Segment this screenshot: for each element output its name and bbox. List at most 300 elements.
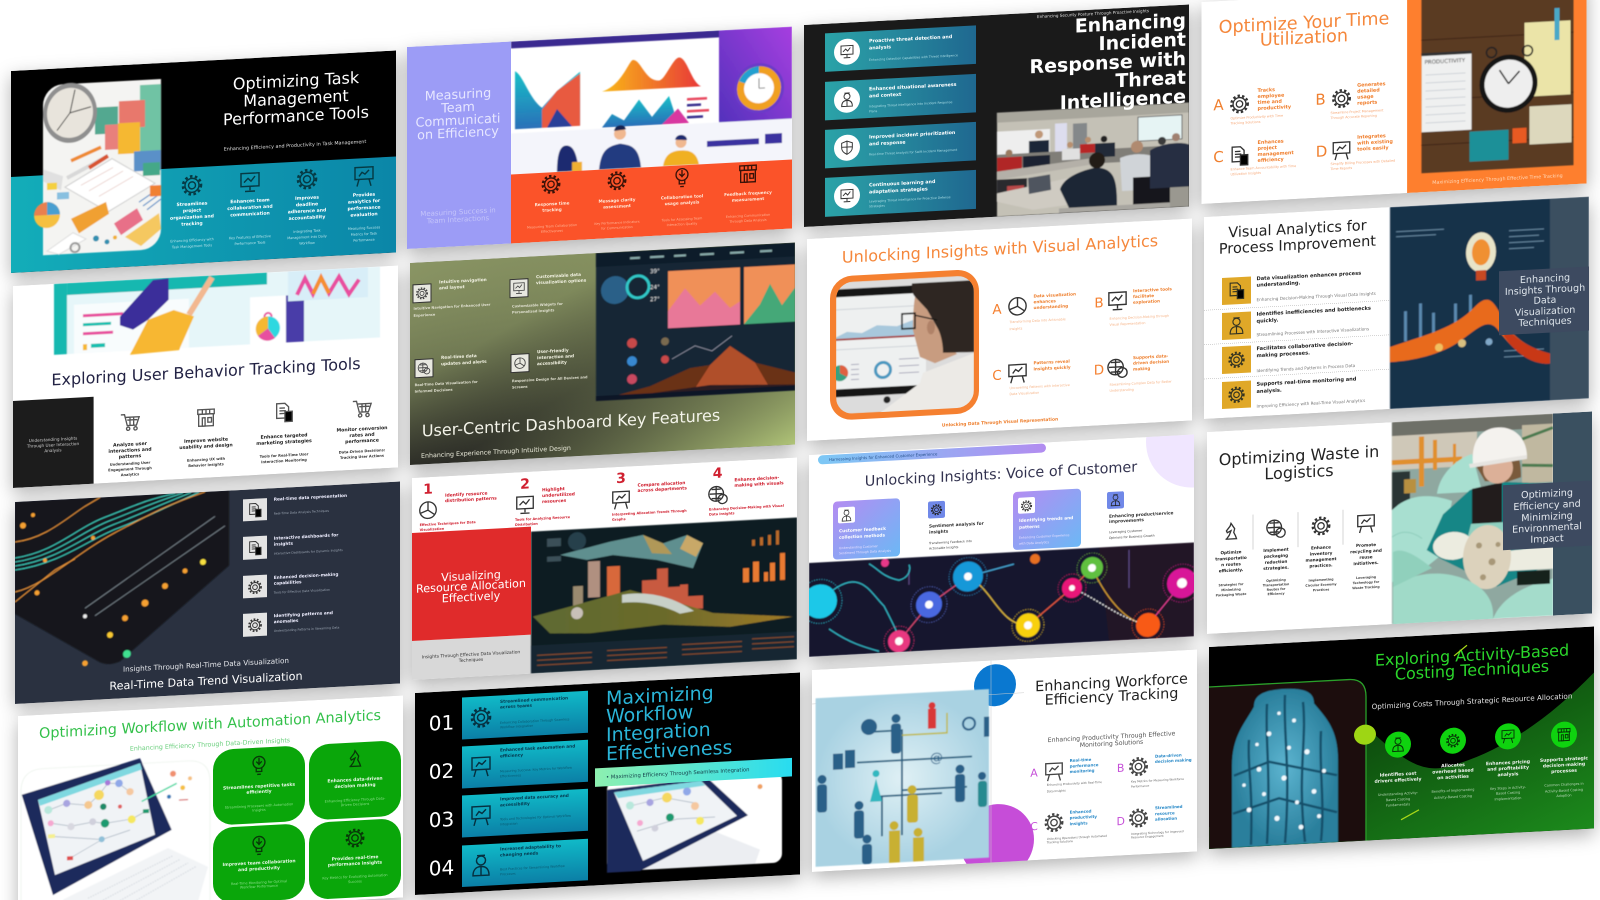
items A B C D: Data Visualization: [1010, 391, 1039, 396]
title: Maximizing: [606, 682, 714, 710]
features: Intuitive navigation: [439, 276, 487, 285]
callout label: Minimizing: [1521, 510, 1573, 524]
picture: glowing bottle jar: [1209, 679, 1366, 849]
step cards: Integration: [500, 822, 518, 826]
panel: Exploring User Behavior Tracking Tools: [13, 265, 398, 488]
step cards: Improved data accuracy and: [500, 792, 569, 802]
items A B C D: Data Insights: [1047, 788, 1066, 793]
items A B C D: Enhancing Productivity with Real-Time: [1047, 780, 1102, 787]
panel: Visualizing Resource Allocation Effectively: [412, 457, 797, 680]
items A B C D: D: [1316, 142, 1327, 161]
list rows: Supports real-time monitoring and: [1256, 376, 1357, 388]
feature cards: [825, 25, 976, 217]
feature columns: measurement: [732, 195, 764, 202]
feature cards: analysis: [869, 44, 891, 51]
highlighted bar: [595, 758, 792, 787]
picture: people network: @: [930, 751, 943, 766]
items A B C D: productivity: [1258, 104, 1292, 112]
feature columns: Management into Daily: [287, 234, 327, 240]
numbered items: Distribution: [515, 522, 538, 527]
panel: Real-Time Data Trend Visualization: [15, 481, 400, 704]
list rows: Facilitates collaborative decision-: [1256, 341, 1353, 352]
green cards: and productivity: [238, 865, 280, 873]
feature columns: Behavior Insights: [188, 462, 224, 468]
feature columns: Practices: [1313, 587, 1329, 592]
picture: laptop workflow: [607, 771, 782, 873]
green cards: Workflow Performance: [240, 884, 278, 890]
banner pill: [818, 443, 1046, 465]
feature columns: Interaction Quality: [667, 222, 697, 227]
feature cards: Plans: [869, 109, 878, 114]
green cards: [213, 740, 401, 900]
subtitle: Enhancing Productivity Through Effective: [1048, 730, 1176, 744]
footer caption: Maximizing Efficiency Through Effective Time Tracking: [1432, 173, 1563, 186]
items A B C D: Tracks: [1258, 87, 1275, 94]
features: Screens: [512, 385, 528, 390]
feature columns: marketing strategies: [256, 438, 312, 447]
feature columns: tracking: [542, 206, 562, 212]
items A B C D: understanding: [1034, 303, 1068, 310]
items A B C D: C: [1030, 820, 1038, 833]
feature columns: Promote: [1356, 541, 1376, 548]
feature columns: Technology for: [1353, 580, 1380, 585]
feature columns: Tools for Real-Time User: [260, 452, 309, 459]
green cards: Improves team collaboration: [222, 858, 296, 868]
step cards: [462, 691, 588, 887]
footer caption: Unlocking Data Through Visual Representation: [942, 416, 1058, 429]
title: Real-Time Data Trend Visualization: [109, 670, 303, 693]
feature columns: Supports strategic: [1540, 755, 1588, 763]
feature cards: collection methods: [839, 532, 885, 540]
picture: training room: [997, 102, 1189, 217]
items: capabilities: [274, 579, 302, 586]
callout label: Efficiency and: [1513, 498, 1581, 513]
red title block: [412, 527, 531, 641]
items A B C D: A: [1030, 766, 1038, 780]
picture: worker sorting plastic waste: [1392, 414, 1553, 626]
feature columns: analysis: [1497, 771, 1519, 778]
feature cards: Customer feedback: [839, 525, 886, 534]
feature cards: Enhancing Customer Experience: [1019, 533, 1070, 540]
green cards: performance insights: [328, 859, 382, 868]
items A B C D: driven decision: [1133, 358, 1169, 365]
items A B C D: Optimize Productivity with Time: [1230, 114, 1283, 120]
step cards: Processes: [500, 872, 516, 876]
feature columns: practices.: [1309, 562, 1333, 568]
title: Threat: [1115, 67, 1186, 92]
green cards: Real-Time Monitoring for Optimal: [231, 879, 287, 886]
green cards: Provides real-time: [332, 854, 378, 862]
features: Customizable Widgets for: [512, 302, 563, 309]
features: Intuitive Navigation for Enhanced User: [414, 303, 491, 311]
feature columns: Feedback frequency: [724, 189, 772, 197]
items A B C D: Real-time: [1070, 756, 1092, 762]
picture: man at monitor: [830, 269, 979, 421]
items A B C D: Uncovering Patterns with Interactive: [1010, 383, 1070, 390]
panel: Exploring Activity-Based Costing Techniques: [1209, 626, 1594, 849]
feature columns: Response time: [535, 200, 570, 207]
title: Unlocking Insights: Voice of Customer: [865, 460, 1137, 490]
feature columns: Benefits of Implementing: [1432, 788, 1474, 794]
features: Experience: [414, 313, 436, 318]
numbered items: Compare allocation: [638, 480, 685, 488]
callout label: [1503, 480, 1592, 550]
items A B C D: exploration: [1133, 298, 1160, 304]
green cards: Streamlining Processes with Automation: [225, 802, 293, 810]
feature columns: Improve website: [184, 436, 228, 444]
feature columns: Provides: [353, 191, 376, 198]
features: User-friendly: [537, 347, 569, 355]
list rows: Identifying Trends and Patterns in Process Data: [1256, 363, 1356, 373]
numbered items: 4: [713, 465, 723, 482]
feature cards: Sentiment analysis for: [929, 520, 985, 529]
title: Logistics: [1264, 460, 1334, 483]
feature columns: Understanding Activity-: [1378, 791, 1419, 797]
accent squiggles: [1401, 645, 1467, 820]
black side block: Understanding Insights: [29, 435, 77, 443]
feature cards: patterns: [1019, 523, 1040, 530]
panel: Measuring Team Communication Efficiency: [407, 26, 792, 249]
numbered items: across departments: [638, 485, 687, 493]
panel: Unlocking Insights: Voice of Customer: [798, 389, 1242, 662]
feature columns: [108, 398, 388, 478]
feature cards: Enhancing Detection Capabilities with Threat Intelligence: [869, 53, 958, 62]
list rows: understanding.: [1256, 280, 1301, 289]
items A B C D: C: [992, 368, 1002, 384]
feature cards: Proactive threat detection and: [869, 34, 953, 44]
feature columns: Tracking User Actions: [340, 454, 384, 460]
features: visualization options: [536, 277, 587, 286]
panel: Optimizing Workflow with Automation Analytics: [18, 695, 403, 900]
items A B C D: Simplify Billing Processes with Detailed: [1330, 159, 1395, 166]
items: Understanding Patterns in Streaming Data: [274, 626, 339, 633]
feature columns: Understanding User: [110, 461, 150, 467]
items A B C D: time and: [1258, 99, 1282, 106]
title: on Efficiency: [417, 124, 499, 143]
items A B C D: Enhancing Decision-Making through: [1110, 314, 1169, 321]
feature columns: interactions and: [108, 446, 152, 454]
items: Enhanced decision-making: [274, 571, 338, 581]
subtitle: Enhancing Efficiency and Productivity in Task Management: [224, 139, 366, 153]
feature columns: Based Costing: [1386, 797, 1410, 802]
panel: Optimizing Task Management Performance Tools: [11, 50, 396, 273]
items A B C D: Enhance Team Accountability with Time: [1230, 164, 1296, 171]
items A B C D: Integrating Technology for Improved: [1131, 829, 1184, 836]
items A B C D: making: [1133, 365, 1150, 371]
items: insights: [274, 540, 293, 547]
step cards: Enhancing Collaboration Through Seamless: [500, 717, 570, 725]
items A B C D: B: [1094, 295, 1104, 312]
picture: glowing data lines: [15, 491, 229, 670]
feature columns: assessment: [603, 203, 631, 209]
items A B C D: enhances: [1034, 298, 1056, 304]
subtitle: Enhancing Experience Through Intuitive Design: [421, 445, 571, 460]
feature columns: Data-Driven Decisions:: [339, 448, 386, 455]
panel: Enhancing Incident Response with Threat Intelligence: [804, 4, 1189, 227]
step cards: Increased adaptability to: [500, 843, 561, 852]
items: Interactive dashboards for: [274, 532, 339, 541]
picture: dark dashboard: 24°: [650, 284, 660, 291]
green cards: Key Metrics for Evaluating Automation: [322, 873, 388, 880]
features: Customizable data: [536, 271, 581, 280]
features: interaction and: [537, 353, 574, 361]
callout label: Environmental: [1512, 521, 1582, 535]
items A B C D: Tracking Solutions: [1230, 120, 1261, 126]
subtitle: Enhancing Efficiency Through Data-Driven Insights: [130, 737, 290, 753]
step numbers: 03: [429, 807, 454, 832]
feature columns: evaluation: [350, 211, 378, 218]
feature columns: Engagement Through: [108, 466, 152, 472]
picture: 3D terrain dashboard: [531, 517, 797, 674]
callout label: [1499, 266, 1589, 335]
items A B C D: decision making: [1155, 757, 1192, 764]
feature columns: Efficiency: [1267, 591, 1285, 596]
feature cards: improvements: [1109, 517, 1144, 525]
feature columns: rates and: [349, 431, 375, 439]
feature columns: Enhance targeted: [260, 432, 308, 440]
numbered items: underutilized: [542, 491, 575, 499]
green cards: efficiently: [246, 788, 272, 795]
items A B C D: Streamline Project Management: [1330, 108, 1384, 115]
green cards: decision making: [334, 781, 376, 790]
numbered items: Highlight: [542, 486, 565, 493]
items: Identifying patterns and: [274, 610, 333, 619]
numbered items: Graphs: [612, 517, 626, 522]
items A B C D: Streamlined: [1155, 803, 1183, 810]
feature cards: and context: [869, 91, 902, 99]
items A B C D: insights quickly: [1034, 364, 1071, 371]
feature columns: Enhances team: [230, 197, 270, 205]
title: User-Centric Dashboard Key Features: [422, 406, 720, 440]
feature columns: Minimizing: [1221, 587, 1241, 592]
feature columns: project: [183, 207, 202, 214]
items: Real-time data representation: [274, 493, 347, 503]
numbered items: Interpreting Allocation Trends Through: [612, 509, 687, 517]
feature columns: organization and: [170, 213, 214, 221]
title: Efficiency Tracking: [1045, 686, 1178, 709]
feature columns: Packaging Waste: [1216, 592, 1246, 598]
items A B C D: B: [1315, 90, 1326, 109]
feature columns: reduction: [1265, 558, 1287, 564]
title: Optimizing Workflow with Automation Analytics: [39, 708, 381, 742]
items A B C D: Unlocking Operations through Automated: [1047, 834, 1107, 841]
feature columns: Optimize: [1220, 549, 1242, 555]
black side block: Through User Interaction: [26, 440, 79, 448]
feature cards: Actionable Insights: [929, 545, 959, 551]
title: Team: [440, 99, 475, 116]
decorative lavender circle: [1146, 389, 1242, 490]
step cards: Enhanced task automation and: [500, 743, 575, 753]
picture: woman at analytics wall: [54, 266, 380, 359]
numbered items: Enhancing Decision-Making with Visual: [709, 504, 784, 512]
feature cards: Leveraging Customer: [1109, 528, 1143, 534]
features: and layout: [439, 284, 465, 291]
title: Optimizing Waste in: [1219, 441, 1379, 469]
features: Responsive Design for All Devices and: [512, 375, 588, 383]
items A B C D: [992, 286, 1172, 399]
features: [413, 271, 588, 395]
picture: alarm clock on desk: PRODUCTIVITY: [1424, 57, 1466, 66]
banner pill: Harnessing Insights for Enhanced Customer Experience: [829, 451, 938, 462]
feature columns: Adoption: [1556, 793, 1572, 798]
feature columns: Common Challenges in: [1544, 782, 1584, 788]
feature cards: Transforming Feedback into: [928, 539, 972, 545]
numbered items: Identify resource: [445, 490, 487, 498]
picture: people network: [816, 689, 989, 867]
feature columns: patterns: [119, 453, 142, 460]
title: Exploring Activity-Based: [1375, 640, 1569, 669]
list rows: Streamlining Processes with Interactive Visualizations: [1256, 326, 1369, 337]
features: Real-Time Data Visualization for: [415, 380, 478, 387]
feature columns: overhead based: [1432, 767, 1474, 775]
feature columns: Implementation: [1495, 796, 1521, 801]
green curved background: [1209, 672, 1594, 849]
feature cards: adaptation strategies: [869, 186, 928, 195]
feature columns: Improves: [295, 194, 319, 201]
items: [243, 493, 347, 637]
items A B C D: employee: [1258, 93, 1285, 100]
items A B C D: Visual Representation: [1110, 321, 1145, 327]
feature columns: Collaboration tool: [661, 193, 704, 200]
features: Real-time data: [441, 353, 477, 360]
accent dot: [1354, 724, 1376, 745]
title: Process Improvement: [1219, 234, 1376, 258]
feature columns: decision-making: [1543, 761, 1585, 769]
list rows: [1204, 269, 1390, 412]
feature columns: Based Costing: [1496, 790, 1520, 796]
items A B C D: A: [992, 302, 1002, 318]
feature columns: strategies.: [1263, 564, 1289, 571]
numbered items: 3: [616, 471, 626, 487]
items: Real-Time Data Analysis Techniques: [274, 509, 329, 516]
items A B C D: Enhanced: [1070, 808, 1092, 814]
features: Personalized Insights: [512, 308, 554, 315]
subtitle: Insights Through Real-Time Data Visualization: [123, 656, 289, 674]
items A B C D: D: [1116, 815, 1125, 828]
feature columns: n routes: [1221, 561, 1241, 567]
callout label: Visualization: [1515, 304, 1575, 318]
feature columns: Leveraging: [1356, 575, 1377, 580]
feature columns: initiatives.: [1353, 559, 1379, 566]
feature columns: Streamlines: [176, 200, 208, 208]
feature columns: Circular Economy: [1305, 582, 1338, 588]
title: Integration: [606, 719, 711, 746]
numbered items: 1: [423, 481, 433, 498]
feature columns: Through Data Analysis: [728, 218, 767, 224]
items A B C D: D: [1094, 362, 1104, 379]
items: anomalies: [274, 617, 299, 625]
feature columns: transportatio: [1215, 554, 1247, 561]
feature columns: drivers effectively: [1375, 776, 1421, 784]
items A B C D: Transforming Data into Actionable: [1008, 317, 1066, 324]
green cards: Success: [348, 879, 362, 884]
feature columns: Performance: [353, 238, 375, 243]
feature cards: Identifying trends and: [1019, 515, 1073, 524]
feature columns: usability and design: [179, 442, 233, 451]
items A B C D: A: [1213, 96, 1224, 114]
feature cards: Understanding Customer: [839, 544, 879, 550]
title: Enhancing: [1075, 10, 1186, 38]
feature columns: Allocates: [1441, 762, 1465, 769]
title: Incident: [1099, 29, 1186, 55]
panel: Optimize Your Time Utilization: [1202, 0, 1587, 204]
green cards: Insights: [252, 808, 266, 813]
feature columns: collaboration and: [227, 203, 273, 212]
step cards: Best Practices for Streamlining Workflow: [500, 864, 565, 871]
title: Visual Analytics for: [1228, 218, 1367, 241]
items: Interactive Dashboards for Dynamic Insights: [274, 548, 343, 556]
feature columns: Implementing: [1309, 577, 1334, 583]
feature columns: usage analysis: [665, 199, 700, 206]
feature columns: processes: [1551, 768, 1577, 775]
list rows: analysis.: [1256, 388, 1282, 395]
green cards: Streamlines repetitive tasks: [223, 781, 295, 791]
feature cards: Sentiment Through Data Analysis: [839, 549, 891, 555]
feature columns: Interaction Monitoring: [261, 458, 307, 464]
feature columns: Waste Tracking: [1352, 585, 1380, 590]
green cards: Driven Decisions: [341, 802, 369, 807]
picture: laptop workflow: [21, 755, 210, 900]
feature columns: Analytics: [121, 472, 139, 477]
items A B C D: project: [1258, 145, 1278, 152]
title: Workflow: [606, 701, 693, 728]
title: Optimizing Task: [233, 67, 360, 93]
title: Response with: [1030, 48, 1186, 78]
step cards: Streamlined communication: [500, 695, 568, 704]
items A B C D: Streamlining Complex Data for Better: [1110, 380, 1172, 387]
feature columns: accountability: [289, 214, 325, 222]
feature columns: Performance Tools: [235, 240, 266, 246]
items A B C D: Key Metrics for Measuring Workforce: [1131, 777, 1184, 784]
feature columns: Identifies cost: [1380, 770, 1417, 778]
feature columns: packaging: [1264, 552, 1288, 558]
items A B C D: productivity: [1070, 813, 1097, 820]
items A B C D: Supports data-: [1133, 353, 1169, 360]
step cards: Effectiveness: [500, 773, 522, 778]
feature columns: Task Management Tools: [171, 243, 212, 249]
feature columns: Implement: [1263, 546, 1289, 552]
step cards: changing needs: [500, 850, 539, 858]
items A B C D: detailed: [1357, 87, 1380, 95]
step numbers: 01: [429, 710, 454, 736]
step numbers: [429, 710, 454, 881]
feature columns: Enhance: [1311, 544, 1331, 550]
feature cards: Enhanced situational awareness: [869, 81, 957, 92]
items A B C D: efficiency: [1258, 157, 1285, 164]
subtitle: Monitoring Solutions: [1080, 738, 1143, 749]
step cards: Workflow Integration: [500, 724, 533, 729]
items A B C D: Performance: [1131, 784, 1150, 789]
feature cards: Opinions for Business Growth: [1109, 534, 1155, 540]
feature columns: [1375, 719, 1588, 808]
feature columns: Optimizing: [1266, 578, 1286, 583]
feature cards: Leveraging Threat Intelligence for Proactive Defense: [869, 195, 951, 204]
feature cards: Strategies: [869, 204, 885, 209]
list rows: Data visualization enhances process: [1256, 271, 1361, 282]
picture: dark dashboard: [596, 242, 795, 401]
feature cards: and response: [869, 139, 906, 147]
step numbers: 02: [429, 759, 454, 784]
subtitle: Measuring Success in: [420, 206, 496, 218]
feature columns: Activity-Based Costing: [1545, 788, 1583, 794]
picture: dark dashboard: 27°: [650, 296, 660, 303]
highlighted bar: • Maximizing Efficiency Through Seamless Integration: [606, 766, 750, 781]
red title block: Resource Allocation: [416, 576, 526, 595]
panel: Enhancing Workforce Efficiency Tracking: [812, 649, 1197, 888]
numbered items: distribution patterns: [445, 495, 497, 504]
features: updates and alerts: [441, 358, 487, 367]
feature cards: Enhancing product/service: [1109, 510, 1174, 519]
